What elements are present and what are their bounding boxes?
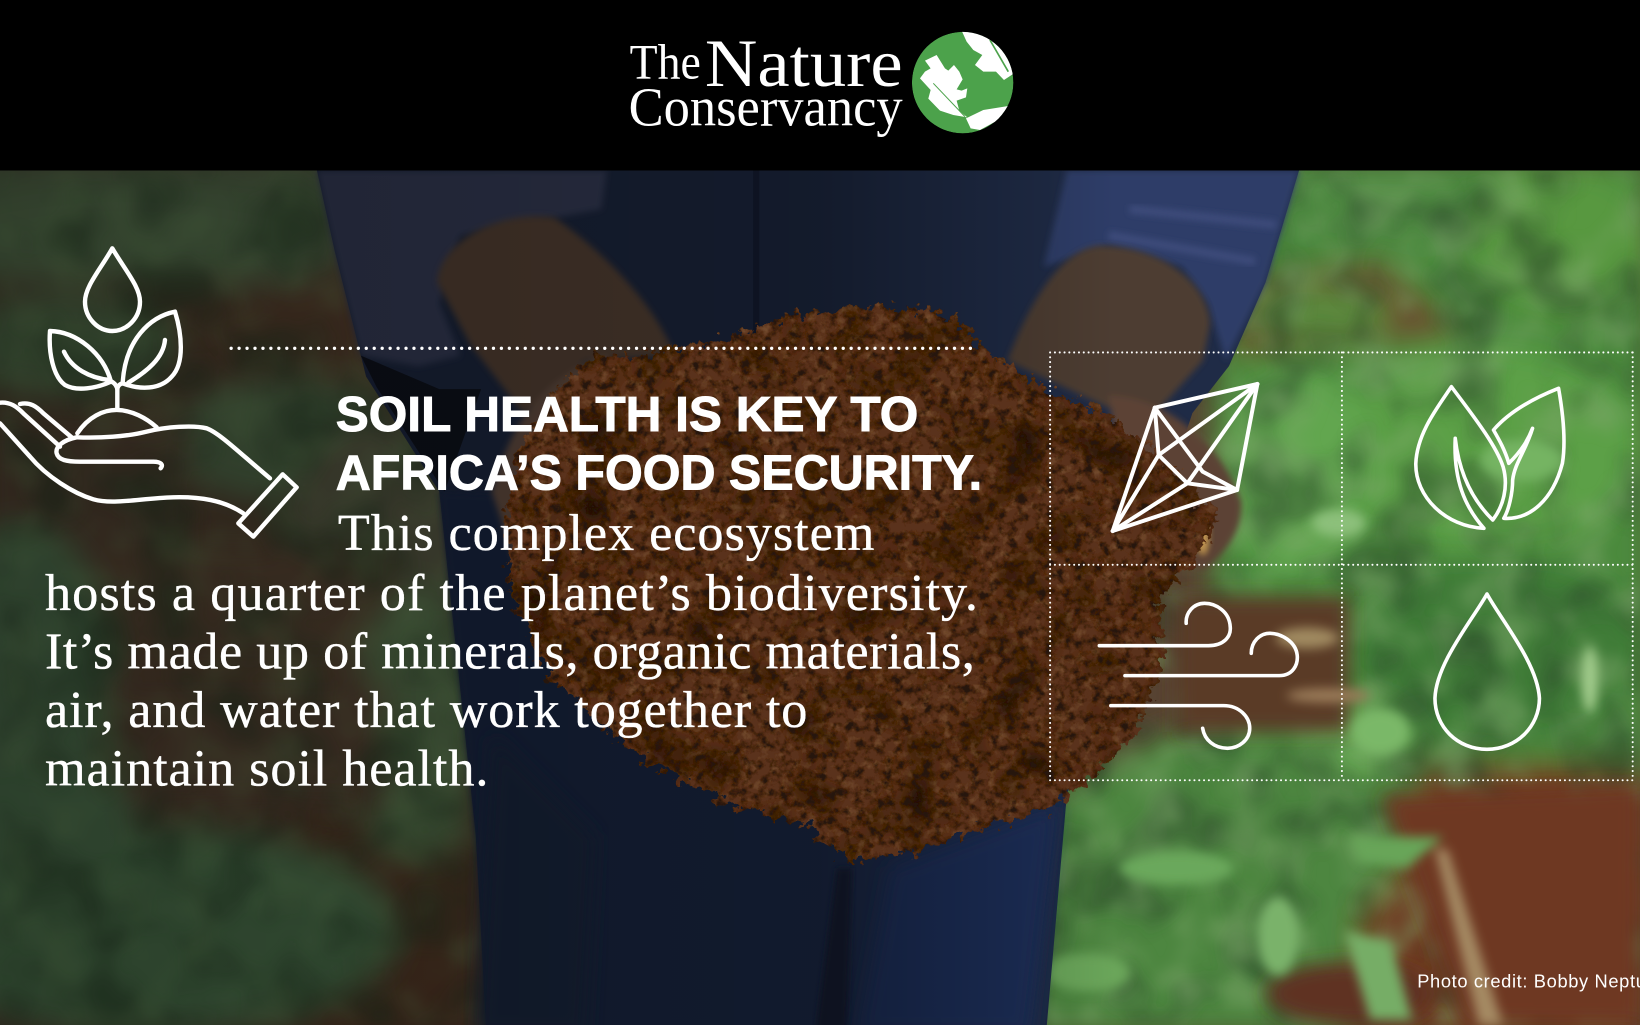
wordmark — [629, 25, 903, 138]
handful of soil — [504, 305, 1218, 863]
globe with oak leaf — [912, 31, 1017, 133]
icon: air — [1099, 603, 1297, 748]
body text: hosts a quarter of the planet’s biodiversity. — [45, 564, 978, 622]
body text: air, and water that work together to — [45, 681, 807, 739]
left dark overlay — [0, 170, 1076, 1025]
dotted rule above heading — [231, 347, 978, 350]
icon: water drop — [1435, 594, 1539, 749]
icon: hand holding sprout with water drop — [0, 248, 297, 537]
body text: This complex ecosystem — [338, 504, 874, 562]
farmer arms and hands — [436, 215, 1246, 570]
farmer shirt and trousers — [317, 170, 1299, 1025]
heading: SOIL HEALTH IS KEY TO — [336, 388, 918, 442]
dotted grid of soil components — [1050, 352, 1633, 780]
body text: maintain soil health. — [45, 739, 488, 797]
heading: AFRICA’S FOOD SECURITY. — [336, 446, 982, 500]
header bar — [0, 0, 1640, 170]
bare earth patches — [1177, 596, 1640, 1025]
wordmark: Conservancy — [629, 77, 903, 138]
logo: The Nature Conservancy — [629, 25, 1017, 138]
body text: It’s made up of minerals, organic materials, — [45, 622, 975, 680]
wordmark: The — [630, 33, 701, 89]
icon: organic leaves — [1416, 387, 1564, 528]
icon: mineral crystal — [1113, 384, 1257, 531]
body text — [45, 504, 978, 797]
right side — [1213, 157, 1640, 784]
heading — [336, 388, 982, 500]
wordmark: Nature — [705, 25, 903, 101]
